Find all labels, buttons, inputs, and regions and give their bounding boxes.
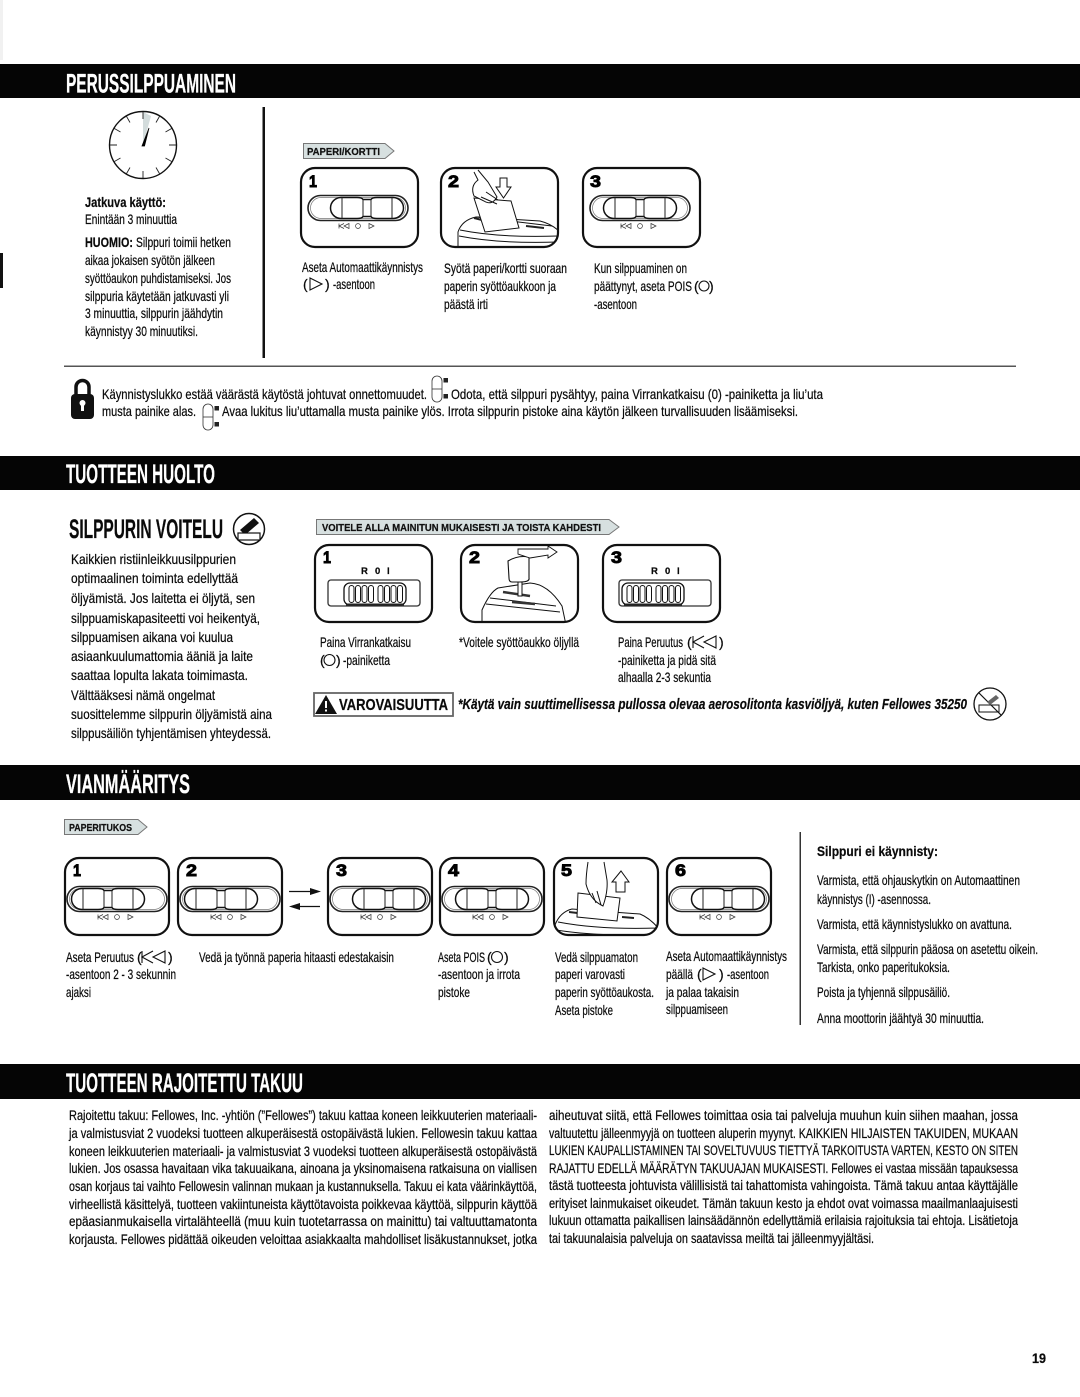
caption: jam step 4 (438, 949, 520, 1000)
caption: jam step 6 (665, 948, 787, 1017)
section heading: Tuotteen rajoitettu takuu (0, 1064, 1080, 1099)
caption: jam step 1: ajaksi (66, 984, 91, 1000)
caption: step 3: ) (709, 278, 714, 294)
caption: lubrication step 1: ( (320, 652, 325, 668)
text: lubrication paragraph: asiaankuulumattomia ääniä ja laite (71, 648, 253, 664)
step 2: oil feed opening (461, 545, 578, 625)
section heading: Vianmääritys (0, 765, 1080, 800)
text: shredder will not start: Poista ja tyhjennä silppusäiliö. (817, 984, 950, 1000)
divider: troubleshooting (800, 832, 801, 1025)
text: shredder will not start: Tarkista, onko paperitukoksia. (817, 959, 950, 975)
text: lubrication paragraph (71, 551, 272, 741)
step 3: reverse switch: I (677, 566, 680, 577)
text: shredder will not start: Varmista, että käynnistyslukko on avattuna. (817, 916, 1012, 932)
text: caution note: *Käytä vain suuttimellisessa pullossa olevaa aerosolitonta kasviöljyä, kuten Fellowes 35250 (458, 697, 967, 713)
caption: jam step 4: ( (487, 949, 492, 965)
text: warranty left column: lukien. Jos osassa havaitaan vika takuuaikana, ainoana ja yksinomaisena ratkaisuna on viallisen (69, 1161, 537, 1176)
caption: jam step 1: -asentoon 2 - 3 sekunnin (66, 966, 176, 982)
step 1: power off switch: 1 (323, 548, 331, 567)
text: warranty left column: Rajoitettu takuu: Fellowes, Inc. -yhtiön (”Fellowes”) takuu kattaa koneen leikkuuterien materiaali- (69, 1108, 537, 1123)
text: warranty left column: koneen leikkuuterien materiaali- ja valmistusviat 3 vuodeksi tuotteen alkuperäisestä ostopäivästä (69, 1144, 537, 1159)
text: shredder will not start: Anna moottorin jäähtyä 30 minuuttia. (817, 1010, 984, 1026)
caption: lubrication step 1: -painiketta (343, 652, 390, 668)
step 1: power off switch (315, 545, 432, 622)
text: warranty left column: ja valmistusviat 2 vuodeksi tuotteen alkuperäisestä ostopäivästä lukien. Fellowesin takuu kattaa (68, 1126, 537, 1141)
caution label: VAROVAISUUTTA (339, 697, 448, 714)
text: continuous use note: silppuria käytetään jatkuvasti yli (85, 288, 229, 304)
step 1: set auto (301, 168, 418, 247)
jam step 6 (667, 858, 771, 935)
text: continuous use note: Jatkuva käyttö: (85, 194, 166, 210)
caption: jam step 1: ) (168, 949, 173, 965)
step 3: reverse switch: 0 (665, 566, 670, 577)
text: continuous use note: Silppuri toimii hetken (136, 234, 231, 250)
caption: jam step 4: ) (504, 949, 509, 965)
caption: lubrication step 1: Paina Virrankatkaisu (320, 634, 411, 650)
step 3: reverse switch: 3 (611, 548, 622, 567)
text: warranty right column: tai takuunalaisia palveluja on saatavissa meiltä tai jälleenmyyjältäsi. (549, 1231, 874, 1246)
heading: Silppurin voitelu: SILPPURIN VOITELU (69, 514, 223, 544)
text: lubrication paragraph: silppuamiskapasiteetti voi heikentyä, (71, 610, 260, 626)
section heading: Tuotteen huolto (0, 456, 1080, 490)
caution label (314, 693, 453, 716)
caption: jam step 5: Vedä silppuamaton (555, 949, 638, 965)
text: start lock note: Avaa lukitus liu’uttamalla musta painike ylös. Irrota silppurin pistoke aina käytön jälkeen turvallisuuden lisäämiseksi. (222, 403, 798, 419)
jam step 5: pull paper: 5 (561, 861, 572, 880)
caption: jam step 4: -asentoon ja irrota (438, 966, 520, 982)
jam step 1 (65, 858, 169, 935)
jam step 3: 3 (336, 861, 347, 880)
text: continuous use note: aikaa jokaisen syötön jälkeen (85, 252, 215, 268)
text: shredder will not start (817, 843, 1038, 1026)
step 3: reverse switch: R (651, 566, 658, 577)
jam step 4: 4 (448, 861, 460, 880)
tag: Paperitukos: PAPERITUKOS (69, 822, 132, 834)
arrows: back and forth (289, 888, 321, 910)
step 2: feed paper (441, 168, 560, 250)
caption: lubrication step 3: Paina Peruutus (618, 634, 683, 650)
text: lubrication paragraph: öljyämistä. Jos laitetta ei öljytä, sen (71, 590, 255, 606)
caption: step 1: Aseta Automaattikäynnistys (302, 259, 423, 275)
caption: step 2: päästä irti (444, 296, 488, 312)
caption: lubrication step 3: ) (719, 634, 724, 650)
caption: jam step 5: Aseta pistoke (555, 1002, 613, 1018)
jam step 4 (440, 858, 544, 935)
step 1: set auto: 1 (309, 172, 317, 191)
caption: lubrication step 3 (618, 634, 724, 685)
step 3: turn off: 3 (590, 172, 601, 191)
caption: step 3: Kun silppuaminen on (594, 260, 687, 276)
text: warranty left column (68, 1108, 537, 1247)
icon: padlock (71, 380, 94, 419)
section heading: Tuotteen rajoitettu takuu: TUOTTEEN RAJOITETTU TAKUU (66, 1068, 303, 1098)
caption: lubrication step 3: ( (687, 634, 692, 650)
jam step 1: 1 (73, 861, 81, 880)
text: start lock note (102, 376, 823, 430)
caption: lubrication step 3: -painiketta ja pidä sitä (618, 652, 716, 668)
text: warranty right column: aiheutuvat siitä, että Fellowes toimittaa osia tai palveluja muuhun kuin siihen maahan, jossa (549, 1108, 1018, 1123)
text: lubrication paragraph: silppusäiliön tyhjentämisen yhteydessä. (71, 725, 271, 741)
text: lubrication paragraph: Kaikkien ristiinleikkuusilppurien (71, 551, 236, 567)
caption: step 1: ( (303, 276, 308, 292)
side tab mark (0, 253, 3, 288)
icon: clock (110, 112, 176, 178)
text: start lock note: Odota, että silppuri pysähtyy, paina Virrankatkaisu (0) -painiketta ja liu’uta (451, 386, 823, 402)
caption: jam step 5: paperin syöttöaukosta. (555, 984, 654, 1000)
text: warranty right column (549, 1108, 1018, 1246)
text: warranty left column: virheellistä käsittelyä, tuotteen vakiintuneista käyttötavoista poikkevaa käyttöä, silppurin käyttöä (69, 1197, 537, 1212)
text: continuous use note: Enintään 3 minuuttia (85, 211, 177, 227)
text: warranty left column: osan korjaus tai vaihto Fellowesin valinnan mukaan ja kustannuksella. Takuu ei kata väärinkäyttöä, (69, 1179, 537, 1194)
icon: oil bottle (234, 514, 264, 544)
caption: jam step 4: Aseta POIS (438, 949, 485, 965)
caption: jam step 5: paperi varovasti (555, 966, 625, 982)
step 1: power off switch: 0 (375, 566, 380, 577)
divider: vertical (262, 107, 265, 358)
caption: step 1: -asentoon (333, 276, 375, 292)
jam step 3 (328, 858, 432, 935)
text: warranty left column: korjausta. Fellowes pidättää oikeuden veloittaa asiakkaalta mahdolliset lisäkustannukset, jotka (69, 1232, 537, 1247)
text: continuous use note: käynnistyy 30 minuutiksi. (85, 323, 198, 339)
caption: step 3: päättynyt, aseta POIS (594, 278, 692, 294)
caption: step 2 (444, 260, 567, 312)
step 3: turn off (583, 168, 700, 247)
caption: jam steps 2 and 3: Vedä ja työnnä paperia hitaasti edestakaisin (199, 949, 394, 965)
text: continuous use note: syöttöaukon puhdistamiseksi. Jos (85, 270, 231, 286)
caption: jam step 1: Aseta Peruutus (66, 949, 134, 965)
icon: no oil (974, 688, 1006, 720)
caption: step 1 (302, 259, 423, 292)
caption: lubrication step 1 (320, 634, 411, 668)
caption: jam step 4: pistoke (438, 984, 470, 1000)
text: lubrication paragraph: Välttääksesi nämä ongelmat (71, 687, 215, 703)
jam step 2 (178, 858, 282, 935)
text: continuous use note: HUOMIO: (85, 234, 133, 250)
caption: step 3 (594, 260, 714, 312)
caption: jam step 6: päällä (666, 966, 693, 982)
caption: jam step 6: silppuamiseen (666, 1001, 728, 1017)
text: continuous use note (85, 194, 231, 339)
text: start lock note: Käynnistyslukko estää väärästä käytöstä johtuvat onnettomuudet. (102, 386, 427, 402)
caption: step 2: paperin syöttöaukkoon ja (444, 278, 556, 294)
text: lubrication paragraph: suosittelemme silppurin öljyämistä aina (71, 706, 272, 722)
text: shredder will not start: käynnistys (I) -asennossa. (817, 891, 931, 907)
jam step 5: pull paper (554, 858, 660, 936)
text: continuous use note: 3 minuuttia, silppurin jäähdytin (85, 305, 223, 321)
step 1: power off switch: R (361, 566, 368, 577)
section heading: Tuotteen huolto: TUOTTEEN HUOLTO (66, 459, 215, 489)
text: lubrication paragraph: optimaalinen toiminta edellyttää (71, 570, 238, 586)
caption: lubrication step 3: alhaalla 2-3 sekuntia (618, 669, 711, 685)
section heading: Perussilppuaminen (0, 64, 1080, 98)
caption: jam step 6: -asentoon (727, 966, 769, 982)
section heading: Vianmääritys: VIANMÄÄRITYS (66, 769, 190, 799)
caption: step 3: ( (694, 278, 699, 294)
corner mark: top left (0, 0, 3, 60)
text: shredder will not start: Silppuri ei käynnisty: (817, 843, 938, 859)
text: lubrication paragraph: silppuamisen aikana voi kuulua (71, 629, 233, 645)
page number: 19 (1032, 1350, 1046, 1366)
step 2: feed paper: 2 (448, 172, 459, 191)
text: start lock note: musta painike alas. (102, 403, 196, 419)
jam step 6: 6 (675, 861, 686, 880)
caption: step 3: -asentoon (594, 296, 637, 312)
divider: horizontal (64, 366, 1016, 367)
caption: jam step 6: Aseta Automaattikäynnistys (666, 948, 787, 964)
step 3: reverse switch (603, 545, 720, 622)
jam step 2: 2 (186, 861, 197, 880)
caption: jam step 1 (66, 949, 176, 1000)
step 1: power off switch: I (387, 566, 390, 577)
tag: Paperi/Kortti: PAPERI/KORTTI (307, 146, 380, 158)
caption: lubrication step 1: ) (336, 652, 341, 668)
caption: jam step 6: ( (697, 966, 702, 982)
caption: jam step 1: ( (137, 949, 142, 965)
text: warranty left column: epäasianmukaisella virtalähteellä (muu kuin tuotetarrassa on mainittu) tai valtuuttamatonta (69, 1214, 537, 1229)
caption: lubrication step 2: *Voitele syöttöaukko öljyllä (459, 634, 579, 650)
caption: step 2: Syötä paperi/kortti suoraan (444, 260, 567, 276)
tag: lubrication instruction: VOITELE ALLA MAINITUN MUKAISESTI JA TOISTA KAHDESTI (322, 522, 601, 534)
caption: jam step 6: ja palaa takaisin (665, 984, 739, 1000)
section heading: Perussilppuaminen: PERUSSILPPUAMINEN (66, 68, 236, 98)
text: lubrication paragraph: saattaa lopulta lakata toimimasta. (71, 667, 248, 683)
caption: step 1: ) (325, 276, 330, 292)
caption: jam step 6: ) (719, 966, 724, 982)
step 2: oil feed opening: 2 (469, 548, 480, 567)
caption: jam step 5 (555, 949, 654, 1018)
